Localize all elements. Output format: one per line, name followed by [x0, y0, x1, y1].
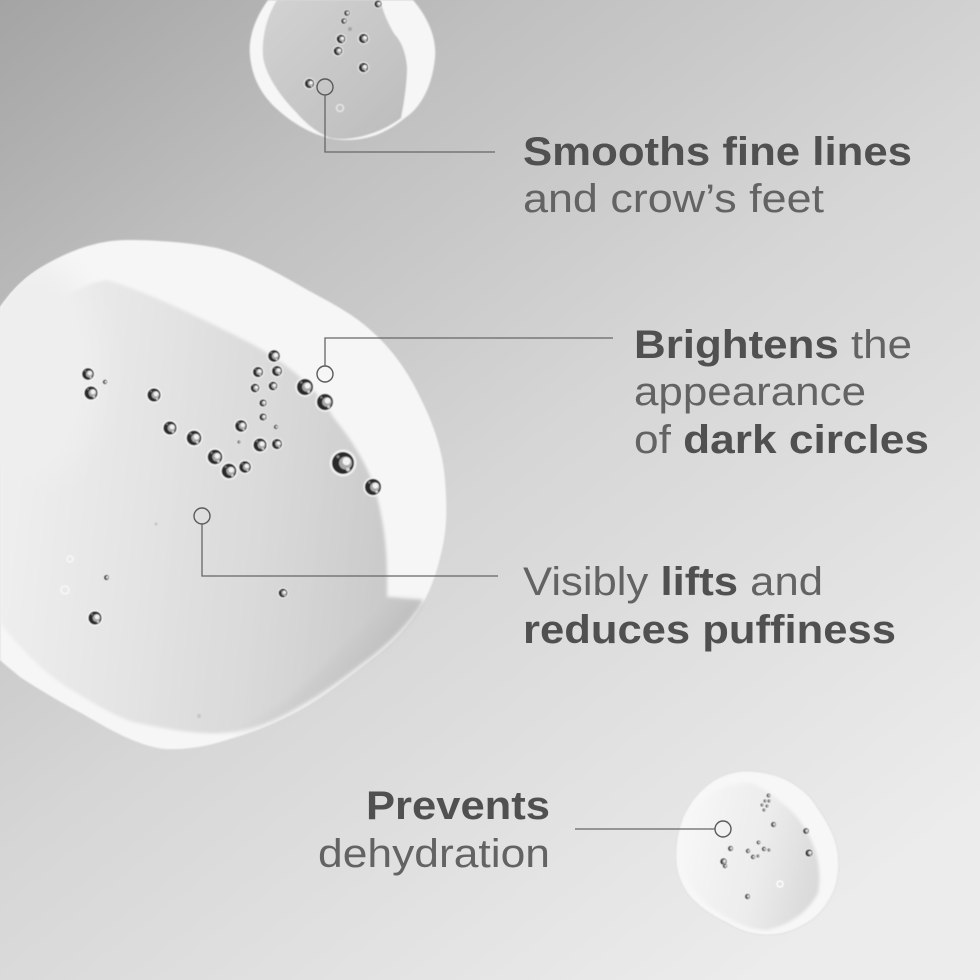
bubbles in small drop: [719, 793, 814, 900]
callout: smooths fine lines: [317, 79, 912, 221]
callout: lifts and reduces puffiness: Visibly lifts and: [523, 560, 823, 604]
callout: smooths fine lines: and crow’s feet: [523, 177, 824, 221]
top serum drop: [250, 0, 435, 140]
callout: prevents dehydration: Prevents: [366, 784, 550, 828]
lower-right dark rim: [233, 600, 423, 735]
callout: prevents dehydration: [318, 784, 731, 876]
callout: smooths fine lines: Smooths fine lines: [523, 130, 912, 174]
callout: brightens dark circles: appearance: [634, 370, 866, 414]
callout: brightens dark circles: Brightens the: [634, 323, 912, 367]
callout: brightens dark circles: of dark circles: [634, 418, 929, 462]
large serum drop: [0, 240, 446, 749]
bubbles in large drop: [61, 349, 383, 718]
callout: lifts and reduces puffiness: [194, 508, 896, 652]
soft left fade: [0, 266, 44, 396]
bubbles in top drop: [304, 0, 382, 111]
callout: brightens dark circles: [317, 323, 929, 462]
callout: lifts and reduces puffiness: reduces puffiness: [523, 608, 896, 652]
small serum drop: [676, 771, 839, 935]
callout: prevents dehydration: dehydration: [318, 832, 550, 876]
